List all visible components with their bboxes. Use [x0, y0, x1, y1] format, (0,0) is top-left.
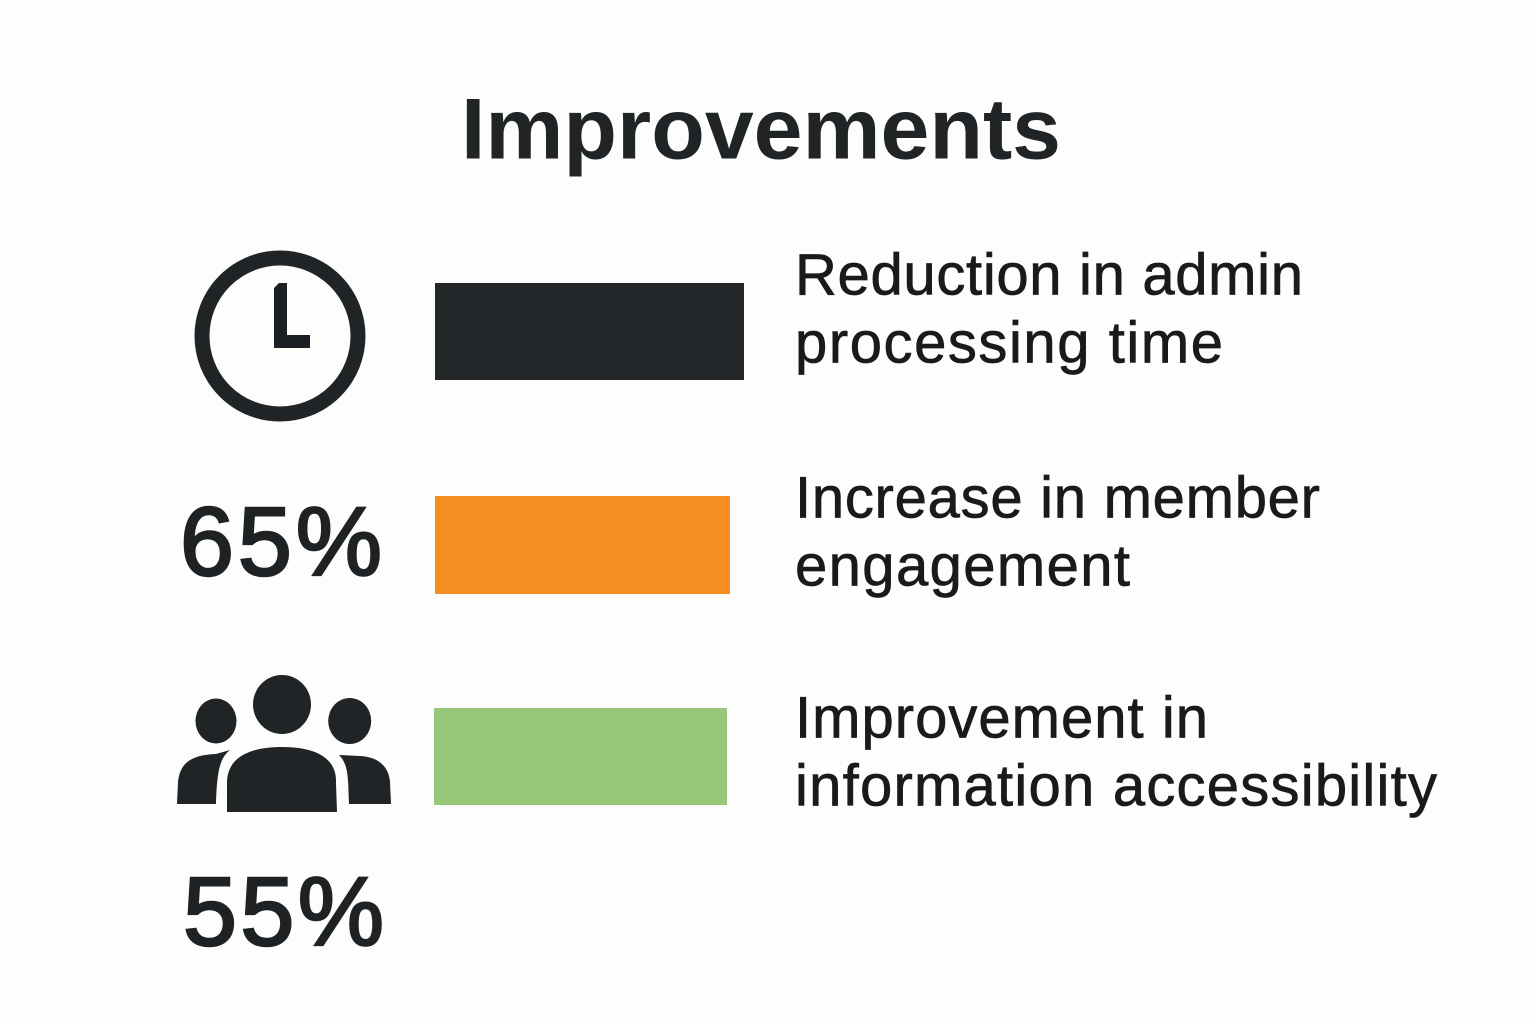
label: reduction in admin processing time: Reduction in admin: [795, 242, 1303, 308]
title: Improvements: [461, 82, 1061, 178]
label: increase in member engagement: Increase in member: [795, 466, 1320, 530]
label: increase in member engagement: engagement: [795, 534, 1130, 598]
label: improvement in information accessibility: Improvement in: [795, 686, 1208, 750]
value: 55%: 55%: [183, 857, 384, 966]
bar: improvement in information accessibility: [434, 708, 727, 805]
label: improvement in information accessibility: information accessibility: [795, 754, 1437, 818]
icon: group of people: [177, 675, 391, 812]
icon: clock: [202, 258, 358, 414]
bar: increase in member engagement: [435, 496, 730, 594]
label: reduction in admin processing time: processing time: [795, 310, 1223, 376]
bar: reduction in admin processing time: [435, 283, 744, 380]
value: 65%: 65%: [180, 487, 382, 596]
